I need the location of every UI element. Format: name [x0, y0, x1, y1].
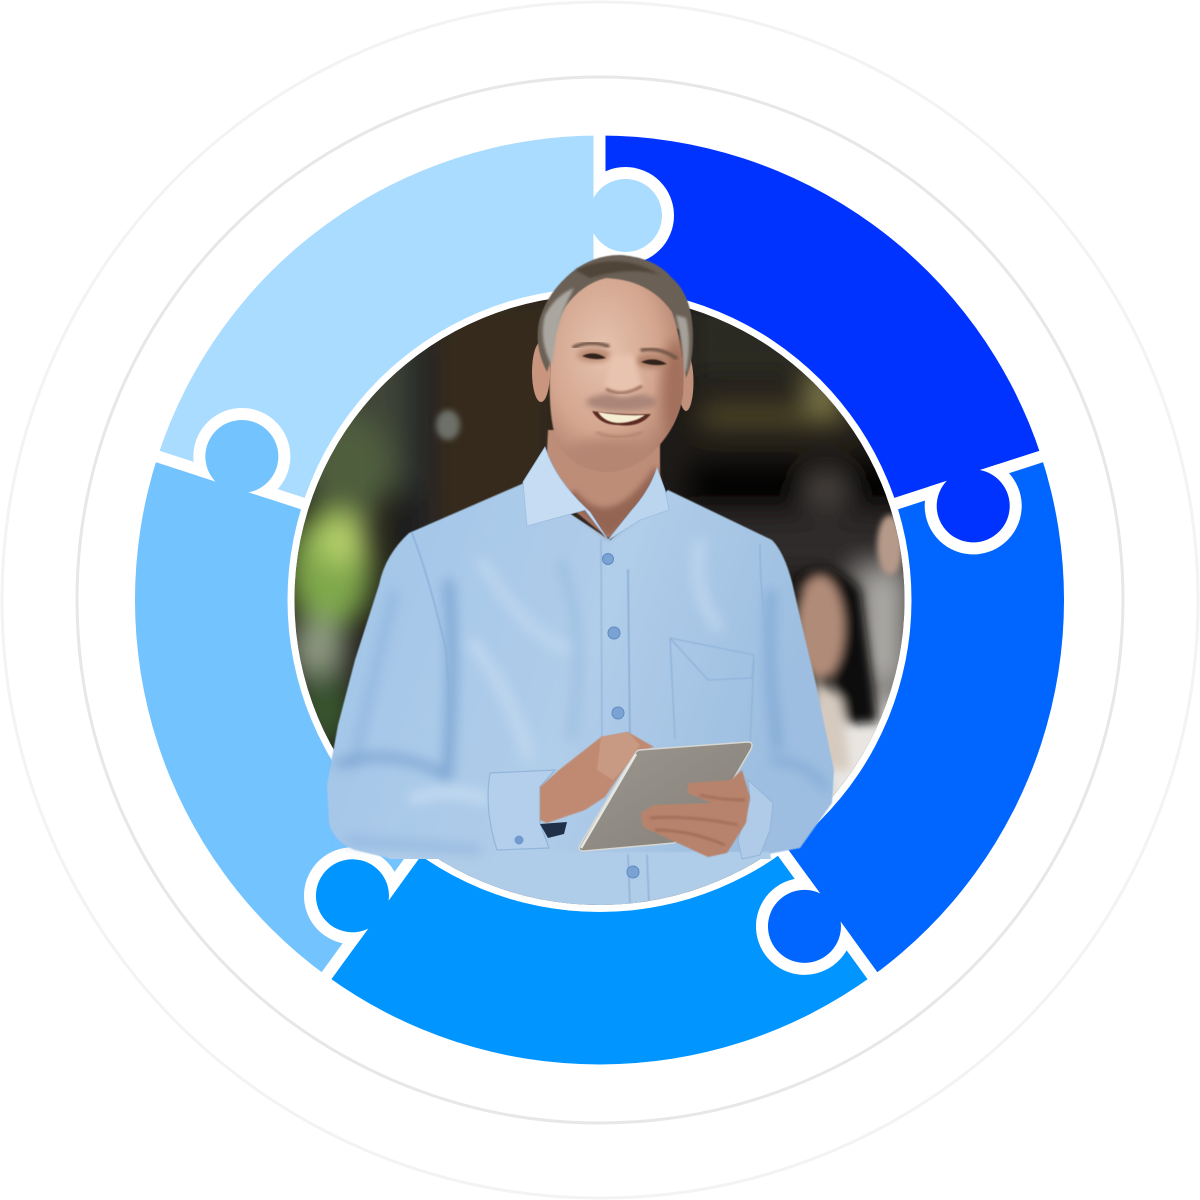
puzzle ring: [135, 120, 1079, 1064]
brow right: [642, 349, 676, 358]
hair back: [538, 255, 693, 378]
left hand: [540, 732, 654, 823]
chin shade: [596, 432, 642, 437]
brow left: [574, 343, 608, 347]
neck: [546, 430, 660, 538]
segment: azure: [326, 600, 872, 1064]
ear right: [678, 353, 694, 411]
mouth: [592, 411, 651, 426]
finger lines: [650, 795, 745, 845]
segment: sky blue: [135, 456, 600, 976]
nose: [605, 355, 642, 396]
eye socket left: [577, 348, 611, 362]
segment: royal blue: [600, 456, 1064, 976]
shirt seams: [412, 533, 770, 905]
grey temple: [543, 288, 574, 366]
nose shadow: [606, 386, 642, 393]
right cuff: [738, 780, 773, 859]
cheek shade right: [662, 340, 690, 440]
eye left: [582, 353, 606, 359]
segment: pale blue: [158, 136, 599, 600]
right hand: [641, 770, 750, 857]
tablet edge: [581, 754, 636, 848]
tablet: [579, 742, 752, 851]
ear left: [532, 342, 550, 402]
gap and knob: upper left: [156, 408, 305, 510]
grey temple right: [676, 315, 689, 372]
cuff button: [514, 836, 524, 844]
shirt buttons: [602, 554, 639, 878]
inner decorative ring: [77, 77, 1123, 1123]
hair crown shading: [575, 261, 660, 278]
neck shadow: [562, 465, 662, 538]
gap and knob: lower left: [304, 847, 419, 980]
collar left: [523, 447, 608, 540]
left cuff: [488, 770, 555, 850]
lower face shade: [576, 436, 636, 460]
photo background: [285, 290, 910, 910]
segment: dark blue: [600, 136, 1041, 600]
man: [327, 255, 834, 925]
white photo border: [288, 288, 912, 912]
left finger over tablet: [597, 732, 640, 780]
gap and knob: upper right: [894, 450, 1043, 554]
gap and knob: lower right: [756, 850, 878, 980]
facial features: [570, 336, 684, 460]
shirt folds: [335, 540, 828, 850]
upper lip shade: [586, 393, 658, 411]
teeth: [598, 412, 645, 423]
collar right: [608, 468, 669, 540]
eye right: [641, 359, 667, 365]
face: [550, 278, 683, 472]
gap and knob: top: [594, 136, 674, 260]
shirt torso and arms: [327, 483, 834, 925]
tablet back: [579, 742, 752, 851]
eye socket right: [635, 354, 669, 368]
left sleeve lining: [540, 822, 567, 838]
